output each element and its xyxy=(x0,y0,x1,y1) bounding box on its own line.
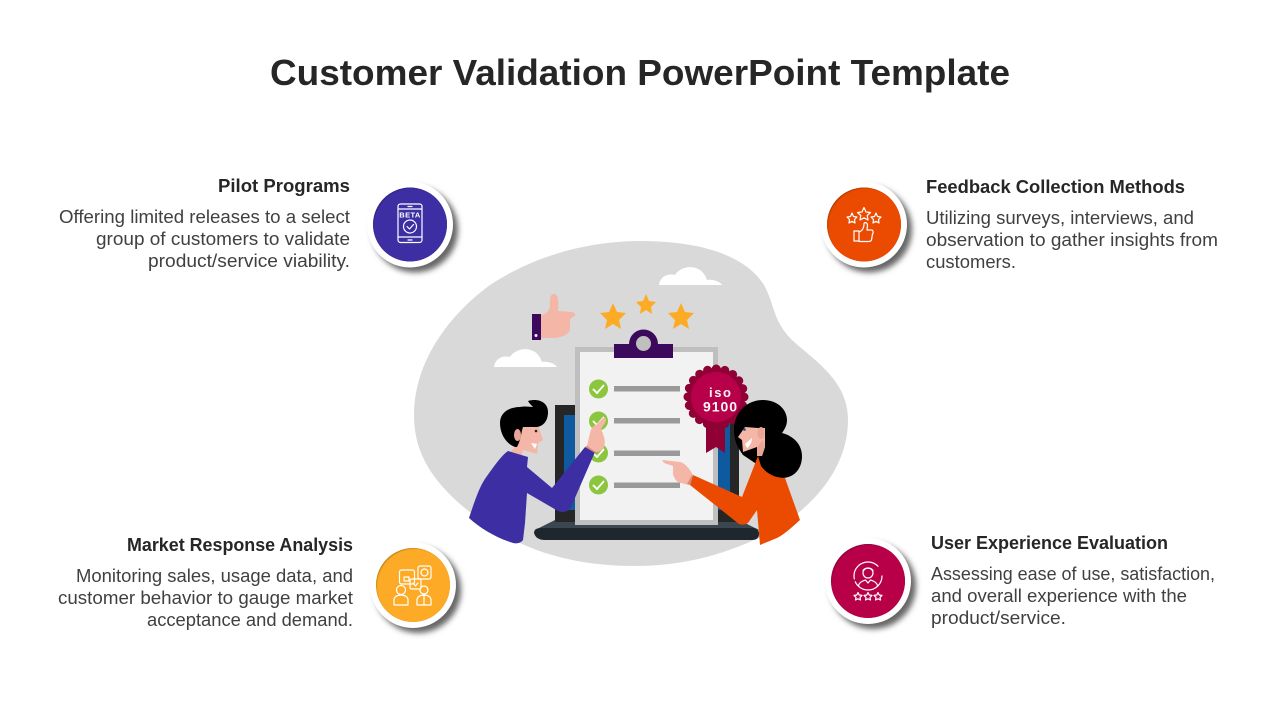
cloud left xyxy=(494,349,557,367)
background blob xyxy=(414,241,848,566)
iso badge: iso xyxy=(709,385,731,400)
text: user experience evaluation xyxy=(931,564,1215,628)
iso badge xyxy=(687,368,745,453)
text: user experience evaluation: and overall experience with the xyxy=(931,586,1187,606)
woman pointing xyxy=(663,400,802,545)
rating stars xyxy=(600,294,694,329)
heading: pilot programs: Pilot Programs xyxy=(218,176,350,196)
text: market response analysis xyxy=(58,566,353,630)
text: user experience evaluation: Assessing ease of use, satisfaction, xyxy=(931,564,1215,584)
panel: user experience evaluation xyxy=(825,533,1215,629)
central illustration xyxy=(414,241,848,566)
heading: feedback collection methods: Feedback Collection Methods xyxy=(926,177,1185,197)
text: feedback collection methods xyxy=(926,208,1218,272)
iso badge: 9100 xyxy=(703,398,737,414)
text: market response analysis: acceptance and demand. xyxy=(147,610,353,630)
icon: beta phone: BETA xyxy=(399,210,421,220)
man pointing xyxy=(469,400,606,543)
text: user experience evaluation: product/service. xyxy=(931,608,1066,628)
thumbs up xyxy=(532,294,575,340)
panel: feedback collection methods xyxy=(821,177,1218,272)
icon: user rating xyxy=(825,538,916,629)
icon: beta phone xyxy=(367,182,458,272)
text: market response analysis: Monitoring sales, usage data, and xyxy=(76,566,353,586)
text: pilot programs xyxy=(59,207,350,271)
title: Customer Validation PowerPoint Template xyxy=(270,52,1010,93)
icon: people and speech bubbles xyxy=(370,542,461,633)
text: market response analysis: customer behavior to gauge market xyxy=(58,588,353,608)
clipboard xyxy=(575,330,718,525)
text: feedback collection methods: Utilizing surveys, interviews, and xyxy=(926,208,1194,228)
cloud right xyxy=(659,267,722,285)
icon: stars and thumb xyxy=(821,182,912,272)
checklist xyxy=(589,380,680,494)
panel: pilot programs xyxy=(59,176,458,272)
heading: user experience evaluation: User Experience Evaluation xyxy=(931,533,1168,553)
text: pilot programs: product/service viability. xyxy=(148,251,350,271)
text: pilot programs: group of customers to validate xyxy=(96,229,350,249)
text: feedback collection methods: observation to gather insights from xyxy=(926,230,1218,250)
text: pilot programs: Offering limited releases to a select xyxy=(59,207,350,227)
heading: market response analysis: Market Response Analysis xyxy=(127,535,353,555)
text: feedback collection methods: customers. xyxy=(926,252,1016,272)
panel: market response analysis xyxy=(58,535,461,633)
laptop xyxy=(534,405,759,540)
